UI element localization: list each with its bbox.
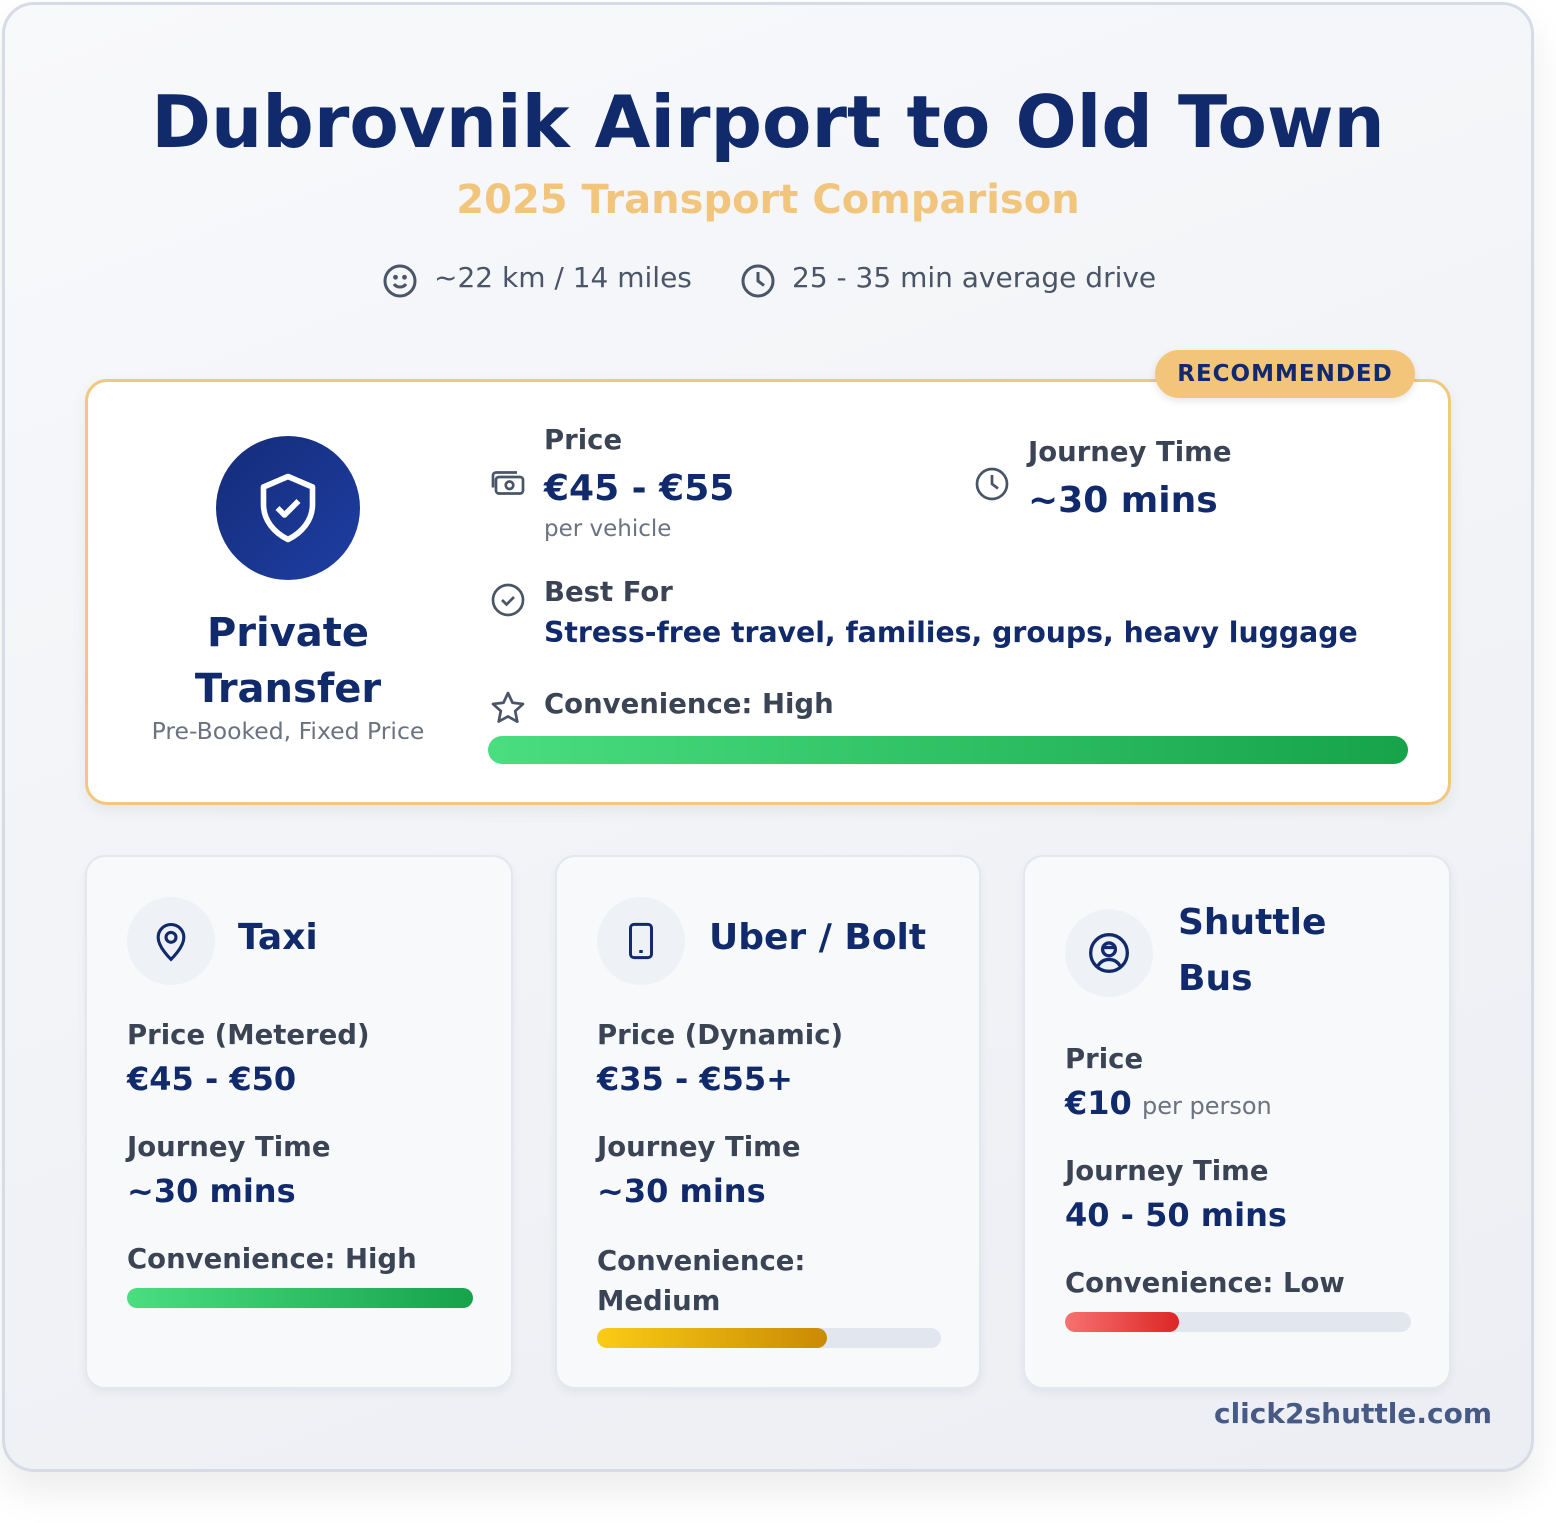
- panel: shuttle bus: €10 per person: [1065, 1084, 1272, 1122]
- badge: [1155, 350, 1415, 398]
- price: Price: [544, 424, 622, 456]
- panel: shuttle bus: 40 - 50 mins: [1065, 1196, 1287, 1234]
- panel: taxi: Taxi: [238, 917, 318, 958]
- info line: ~22 km / 14 miles: [434, 261, 692, 294]
- panel: uber: [555, 855, 981, 1389]
- panel: uber: Uber / Bolt: [709, 917, 926, 958]
- panel: shuttle bus: Convenience: Low: [1065, 1267, 1345, 1299]
- icon: smile: [384, 264, 416, 298]
- heading: Private: [207, 610, 369, 656]
- best for: Stress-free travel, families, groups, heavy luggage: [544, 616, 1358, 649]
- panel: taxi: Journey Time: [127, 1131, 330, 1163]
- journey time: Journey Time: [1028, 436, 1231, 468]
- panel: shuttle bus: Shuttle: [1178, 902, 1326, 943]
- convenience: Convenience: High: [544, 688, 834, 720]
- price: [492, 424, 734, 542]
- panel: uber: Convenience:: [597, 1245, 805, 1277]
- journey time: [976, 436, 1231, 521]
- info line: 25 - 35 min average drive: [792, 261, 1156, 294]
- panel: uber: Journey Time: [597, 1131, 800, 1163]
- price: per vehicle: [544, 516, 671, 542]
- panel: taxi: €45 - €50: [127, 1060, 296, 1098]
- best for: [492, 576, 1358, 649]
- panel: private transfer: Pre-Booked, Fixed Price: [152, 717, 424, 745]
- subtitle: 2025 Transport Comparison: [456, 177, 1080, 223]
- panel: taxi: Price (Metered): [127, 1019, 370, 1051]
- footer brand: click2shuttle.com: [1214, 1397, 1492, 1430]
- panel: taxi: [85, 855, 513, 1389]
- panel: uber: €35 - €55+: [597, 1060, 793, 1098]
- icon: shield: [216, 436, 360, 580]
- badge: RECOMMENDED: [1177, 361, 1393, 387]
- info line: [384, 261, 1156, 298]
- panel: taxi: Convenience: High: [127, 1243, 417, 1275]
- icon: clock: [742, 264, 774, 298]
- panel: uber: ~30 mins: [597, 1172, 766, 1210]
- panel: private transfer: [85, 379, 1451, 805]
- panel: taxi: ~30 mins: [127, 1172, 296, 1210]
- journey time: ~30 mins: [1028, 480, 1218, 521]
- panel: uber: Price (Dynamic): [597, 1019, 843, 1051]
- panel: uber: Medium: [597, 1285, 720, 1317]
- panel: shuttle bus: Price: [1065, 1043, 1143, 1075]
- panel: shuttle bus: Bus: [1178, 958, 1252, 999]
- heading: Transfer: [195, 666, 381, 712]
- heading: [195, 610, 381, 712]
- best for: Best For: [544, 576, 673, 608]
- panel: shuttle bus: [1023, 855, 1451, 1389]
- price: €45 - €55: [544, 468, 734, 509]
- convenience: [488, 688, 1408, 764]
- title: Dubrovnik Airport to Old Town: [151, 80, 1385, 164]
- panel: shuttle bus: Journey Time: [1065, 1155, 1268, 1187]
